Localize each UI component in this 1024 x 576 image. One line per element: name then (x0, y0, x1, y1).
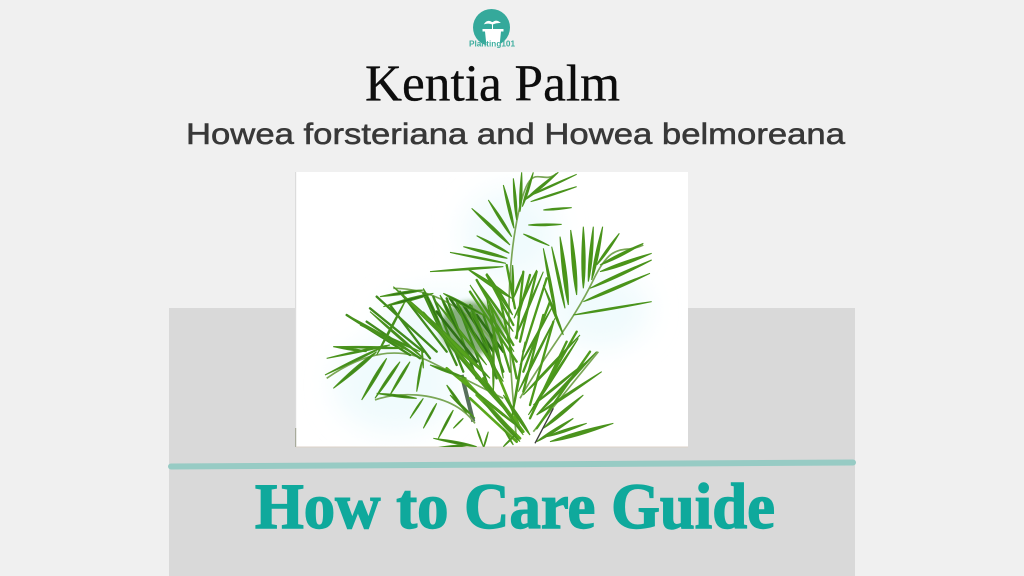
dark stalk detail (535, 408, 553, 443)
dark centre mass (440, 302, 503, 355)
centre frond leaflets (466, 265, 581, 418)
right frond leaflets (542, 226, 652, 335)
logo: Planting101: Planting101 (469, 40, 516, 48)
dark arching frond leaflets (380, 288, 491, 352)
stem (462, 375, 473, 422)
fine leaflets for density (347, 265, 590, 442)
subtitle: Howea forsteriana and Howea belmoreana (186, 118, 845, 151)
background glow (333, 189, 650, 433)
heading: How to Care Guide: How to Care Guide (255, 471, 775, 543)
top frond leaflets (430, 171, 577, 272)
left frond leaflets (325, 298, 467, 401)
lower right frond leaflets (482, 351, 614, 447)
lower frond leaflets (377, 384, 489, 449)
plant photo (295, 171, 688, 449)
teal divider bar (171, 462, 853, 466)
rachises (327, 173, 643, 442)
infographic canvas (168, 9, 856, 576)
palm fronds (325, 171, 652, 449)
long leaves rising left from the base (392, 285, 524, 435)
logo: Planting101 (469, 9, 516, 48)
title: Kentia Palm (365, 56, 620, 112)
panel: grey backdrop (169, 308, 855, 576)
